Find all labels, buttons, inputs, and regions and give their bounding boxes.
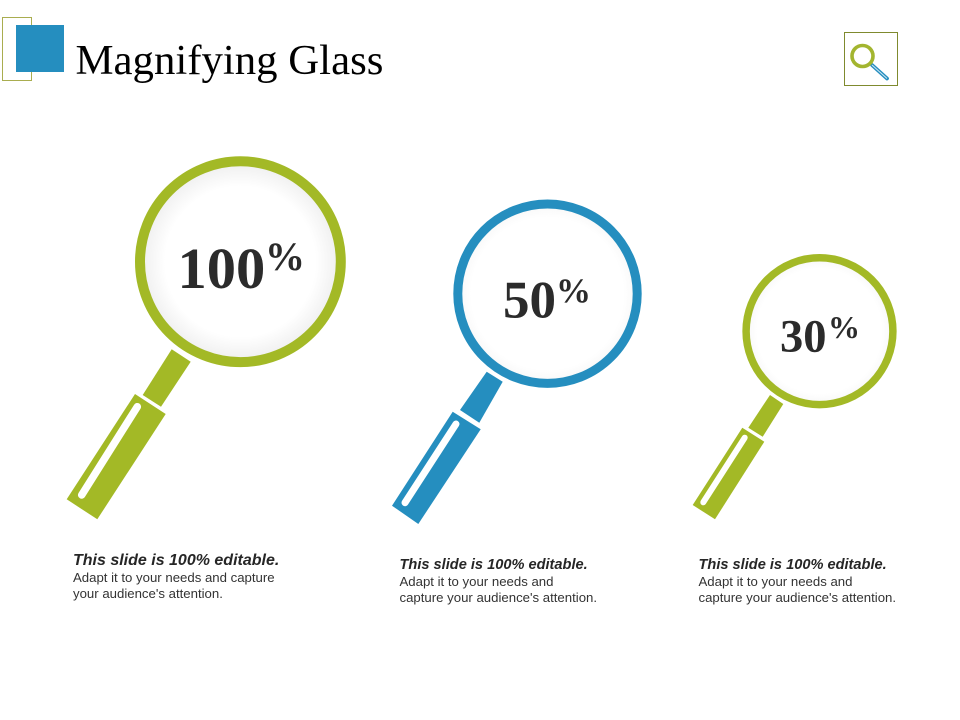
header logo squares: [2, 18, 64, 80]
caption: 100%: This slide is 100% editable.: [73, 552, 279, 569]
caption: 100%: your audience's attention.: [73, 586, 223, 601]
value: 100%: %: [265, 234, 305, 279]
caption: 50%: [400, 557, 597, 605]
value: 30%: 30: [780, 312, 826, 362]
magnifier: 30%: [693, 258, 893, 519]
title: Magnifying Glass: [76, 37, 383, 84]
caption: 100%: Adapt it to your needs and capture: [73, 570, 275, 585]
value: 100%: 100: [178, 236, 265, 301]
caption: 100%: [73, 552, 279, 601]
caption: 30%: capture your audience's attention.: [698, 590, 896, 605]
magnifier: 100%: [67, 161, 341, 519]
caption: 30%: Adapt it to your needs and: [698, 574, 852, 589]
icon: small magnifying glass: [844, 32, 898, 86]
caption: 50%: capture your audience's attention.: [400, 590, 597, 605]
value: 50%: 50: [503, 272, 556, 330]
caption: 50%: Adapt it to your needs and: [400, 574, 553, 589]
value: 30%: %: [828, 309, 860, 345]
caption: 30%: This slide is 100% editable.: [698, 557, 887, 573]
caption: 30%: [698, 557, 896, 605]
magnifier: 50%: [392, 204, 637, 524]
caption: 50%: This slide is 100% editable.: [400, 557, 588, 573]
value: 50%: %: [556, 272, 591, 310]
